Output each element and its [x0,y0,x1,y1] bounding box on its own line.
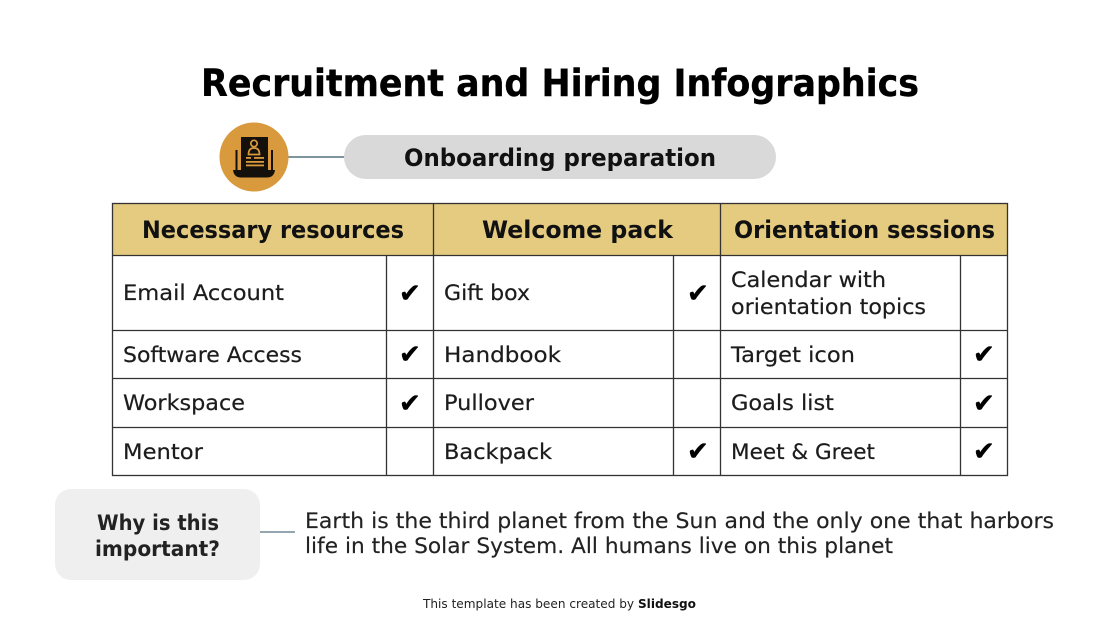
text block: explanation: life in the Solar System. All humans live on this planet [305,534,893,558]
column: necessary resources: Software Access [123,343,302,367]
column: necessary resources: ✔ [399,389,421,419]
column: welcome pack: ✔ [687,279,709,309]
column: necessary resources: Email Account [123,281,284,305]
column: orientation sessions: ✔ [973,437,995,467]
column: necessary resources: Workspace [123,391,245,415]
table header row [112,203,1008,255]
connector: icon to heading pill [288,156,346,158]
column: necessary resources: ✔ [399,340,421,370]
text block: explanation [305,509,1054,558]
table: onboarding checklist [112,203,1008,476]
column: orientation sessions: ✔ [973,389,995,419]
column: orientation sessions: Target icon [730,343,855,367]
column: orientation sessions: Calendar with [731,268,886,292]
column: welcome pack: Pullover [444,391,534,415]
column: welcome pack: Gift box [444,281,530,305]
heading pill: Onboarding preparation: Onboarding preparation [404,144,716,172]
table header row: Orientation sessions [734,216,995,244]
column: orientation sessions [730,268,995,467]
text block: explanation: Earth is the third planet from the Sun and the only one that harbors [305,509,1054,533]
title: Recruitment and Hiring Infographics [201,62,919,105]
table header row: Necessary resources [142,216,404,244]
column: orientation sessions: Goals list [731,391,834,415]
callout: why is this important [55,489,260,580]
column: welcome pack: Handbook [444,343,562,367]
column: welcome pack: ✔ [687,437,709,467]
table grid lines [112,203,1008,476]
table header row: Welcome pack [482,216,674,244]
column: welcome pack [444,279,709,467]
column: necessary resources [123,279,421,464]
column: orientation sessions: Meet & Greet [731,440,875,464]
heading pill: Onboarding preparation [344,135,776,179]
credit line: This template has been created by Slidesgo [422,597,696,611]
column: necessary resources: ✔ [399,279,421,309]
column: orientation sessions: ✔ [973,340,995,370]
callout: why is this important: important? [95,537,220,561]
column: necessary resources: Mentor [123,440,203,464]
column: orientation sessions: orientation topics [731,295,926,319]
connector: callout to explanation [260,531,295,533]
column: welcome pack: Backpack [444,440,553,464]
icon: candidate profile on laptop [220,122,288,192]
callout: why is this important: Why is this [97,511,219,535]
